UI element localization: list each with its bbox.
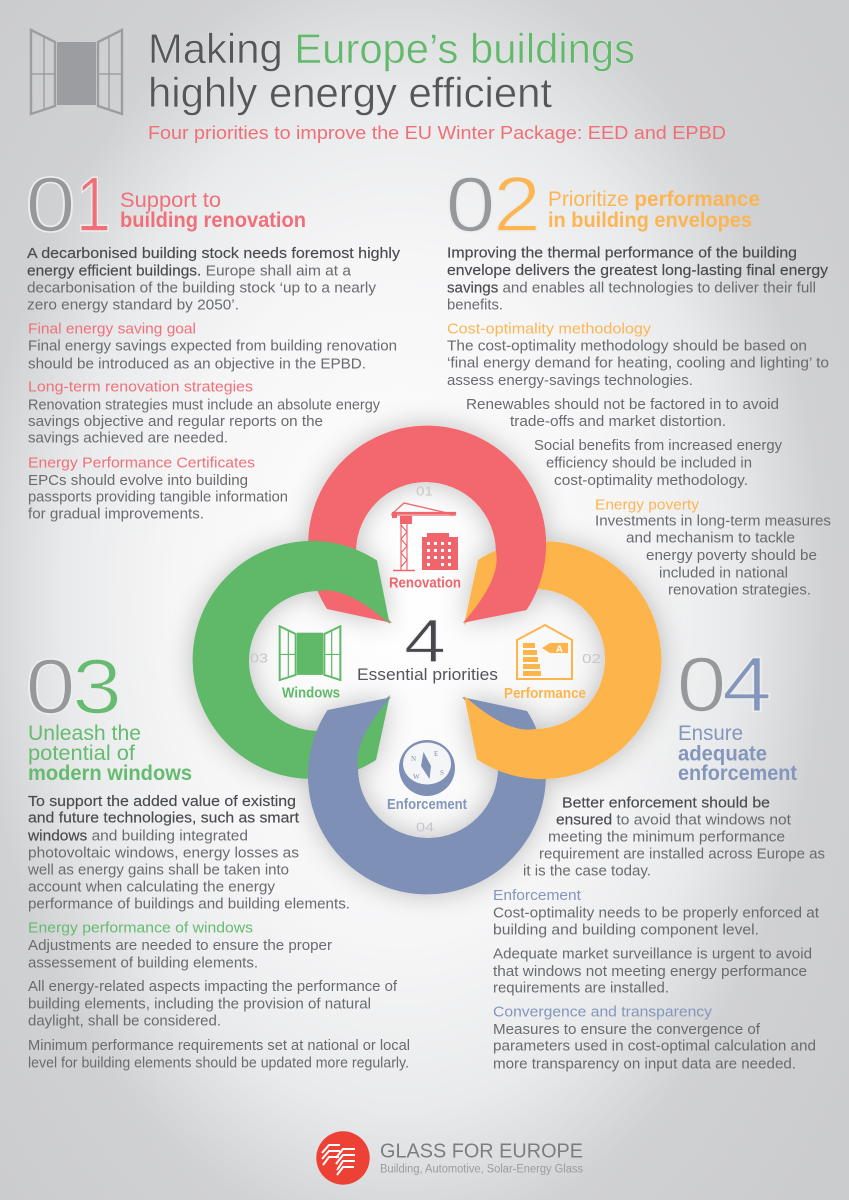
chart: four interlocking priority rings	[193, 426, 661, 894]
energy poverty: and mechanism to tackle	[626, 531, 795, 547]
heading 03: Unleash the	[28, 721, 141, 745]
final energy saving goal: should be introduced as an objective in the EPBD.	[28, 356, 366, 372]
heading 04: adequate	[678, 742, 767, 766]
logo tagline: Building, Automotive, Solar-Energy Glass	[380, 1163, 583, 1175]
energy poverty: Investments in long-term measures	[595, 514, 831, 530]
long-term renovation strategies: Long-term renovation strategies	[28, 380, 253, 396]
cost-optimality methodology: The cost-optimality methodology should be based on	[447, 339, 807, 355]
icon: building	[422, 533, 458, 570]
icon: crane	[392, 503, 456, 570]
energy-related aspects text: All energy-related aspects impacting the performance of	[28, 979, 398, 995]
intro text 02	[447, 246, 829, 313]
intro text 01: energy efficient buildings. Europe shall aim at a	[27, 264, 351, 280]
essential priorities caption: Essential priorities	[357, 666, 498, 684]
intro text 04: it is the case today.	[523, 864, 651, 880]
energy-related aspects text: building elements, including the provision of natural	[28, 996, 371, 1012]
market surveillance text: requirements are installed.	[493, 981, 669, 997]
label: 01: 01	[416, 484, 433, 499]
long-term renovation strategies: Renovation strategies must include an absolute energy	[28, 397, 381, 413]
energy performance certificates	[28, 456, 288, 522]
energy poverty	[595, 497, 831, 598]
enforcement: Enforcement	[493, 888, 581, 904]
convergence and transparency: parameters used in cost-optimal calculation and	[493, 1039, 816, 1055]
heading 01	[120, 188, 306, 232]
ring: windows (green)	[193, 541, 390, 779]
energy-related aspects text: daylight, shall be considered.	[28, 1014, 221, 1030]
number 02: 2	[493, 160, 541, 248]
panel: priority 02	[446, 160, 831, 598]
energy poverty: included in national	[659, 565, 788, 581]
number 02	[446, 160, 541, 248]
market surveillance text: that windows not meeting energy performance	[493, 964, 807, 980]
intro text 04: meeting the minimum performance	[548, 830, 785, 846]
convergence and transparency: Convergence and transparency	[493, 1005, 713, 1021]
minimum requirements text: Minimum performance requirements set at national or local	[28, 1038, 410, 1054]
icon: compass: E	[434, 750, 438, 758]
intro text 01: zero energy standard by 2050’.	[27, 298, 239, 314]
logo: Glass for Europe	[316, 1131, 583, 1185]
cost-optimality methodology	[447, 321, 829, 389]
icon: house energy rating: A	[556, 644, 563, 655]
energy poverty: Energy poverty	[595, 497, 700, 513]
number 04	[676, 640, 772, 728]
title: Making Europe’s buildings	[148, 25, 635, 72]
enforcement: Cost-optimality needs to be properly enforced at	[493, 905, 819, 921]
number 01: 0	[26, 160, 76, 248]
label: 02: 02	[582, 651, 601, 666]
icon: compass: N	[411, 755, 416, 763]
long-term renovation strategies: savings objective and regular reports on the	[28, 414, 323, 430]
intro text 01: A decarbonised building stock needs foremost highly	[27, 246, 401, 262]
final energy saving goal: Final energy saving goal	[28, 322, 196, 338]
title	[148, 25, 635, 116]
long-term renovation strategies: savings achieved are needed.	[28, 431, 228, 447]
intro text 03: windows and building integrated	[27, 829, 248, 845]
number 04: 4	[722, 640, 772, 728]
intro text 04: Better enforcement should be	[562, 795, 770, 811]
energy performance certificates: passports providing tangible information	[28, 490, 288, 506]
long-term renovation strategies	[28, 380, 381, 447]
intro text 03	[27, 794, 350, 912]
energy performance of windows: assessement of building elements.	[28, 955, 258, 971]
minimum requirements text: level for building elements should be updated more regularly.	[28, 1055, 409, 1071]
label: windows: Windows	[282, 684, 340, 701]
label: 04: 04	[416, 820, 434, 835]
title: highly energy efficient	[148, 69, 552, 116]
energy performance certificates: EPCs should evolve into building	[28, 473, 248, 489]
intro text 02: savings and enables all technologies to deliver their full	[447, 281, 816, 297]
intro text 02: Improving the thermal performance of the building	[447, 246, 797, 262]
central label	[357, 607, 498, 684]
heading 02	[548, 187, 760, 232]
ring: performance (orange)	[464, 541, 661, 779]
icon: green window	[280, 626, 340, 680]
energy performance of windows: Energy performance of windows	[28, 921, 253, 937]
cost-optimality methodology: Cost-optimality methodology	[447, 321, 652, 337]
convergence and transparency	[493, 1005, 816, 1072]
final energy saving goal: Final energy savings expected from building renovation	[28, 339, 397, 355]
number 02: 0	[446, 160, 496, 248]
enforcement	[493, 888, 819, 938]
heading 01: building renovation	[120, 208, 306, 232]
number 01	[26, 160, 111, 248]
ring: enforcement (blue)	[308, 697, 546, 894]
energy performance of windows: Adjustments are needed to ensure the proper	[28, 938, 332, 954]
icon: compass: W	[413, 773, 420, 781]
heading 01: Support to	[120, 188, 221, 212]
heading 04: Ensure	[678, 721, 743, 745]
energy performance of windows	[28, 921, 332, 971]
convergence and transparency: Measures to ensure the convergence of	[493, 1022, 761, 1038]
renewables text: trade-offs and market distortion.	[510, 414, 726, 430]
ring: renovation overlap (red)	[428, 460, 546, 623]
panel: priority 04	[493, 640, 825, 1072]
logo mark	[316, 1131, 370, 1185]
number 04: 0	[676, 640, 726, 728]
intro text 02: envelope delivers the greatest long-lasting final energy	[447, 263, 829, 279]
heading 02: Prioritize performance	[548, 187, 760, 211]
number 03	[26, 642, 122, 730]
heading 04	[678, 721, 797, 785]
social benefits text	[534, 438, 783, 489]
intro text 01	[27, 246, 401, 314]
energy performance certificates: Energy Performance Certificates	[28, 456, 255, 472]
renewables text: Renewables should not be factored in to avoid	[466, 397, 779, 413]
number 03: 3	[72, 642, 122, 730]
intro text 01: decarbonisation of the building stock ‘up to a nearly	[27, 281, 377, 297]
logo name: GLASS FOR EUROPE	[380, 1141, 583, 1163]
intro text 04: requirement are installed across Europe as	[539, 846, 825, 862]
label: renovation: Renovation	[389, 575, 461, 592]
minimum requirements text	[28, 1038, 410, 1071]
energy poverty: renovation strategies.	[668, 582, 811, 598]
heading 03: potential of	[28, 741, 135, 765]
icon: house energy rating	[517, 625, 572, 679]
intro text 03: To support the added value of existing	[28, 794, 296, 810]
social benefits text: efficiency should be included in	[546, 456, 752, 472]
panel: priority 03	[26, 642, 410, 1071]
label: enforcement: Enforcement	[387, 796, 467, 813]
heading 03	[28, 721, 192, 785]
final energy saving goal	[28, 322, 397, 372]
intro text 03: performance of buildings and building elements.	[28, 896, 350, 912]
intro text 04	[523, 795, 825, 880]
intro text 03: account when calculating the energy	[28, 879, 276, 895]
label: performance: Performance	[504, 685, 586, 702]
label: 03: 03	[250, 651, 268, 666]
cost-optimality methodology: ‘final energy demand for heating, cooling and lighting’ to	[447, 355, 829, 371]
cost-optimality methodology: assess energy-savings technologies.	[447, 373, 693, 389]
intro text 03: photovoltaic windows, energy losses as	[28, 845, 299, 861]
intro text 03: well as energy gains shall be taken into	[27, 862, 289, 878]
big number 4: 4	[404, 607, 446, 675]
intro text 03: and future technologies, such as smart	[28, 811, 299, 827]
convergence and transparency: more transparency on input data are needed.	[493, 1056, 796, 1072]
heading 02: in building envelopes	[548, 208, 752, 232]
market surveillance text	[493, 946, 812, 997]
energy poverty: energy poverty should be	[646, 548, 817, 564]
enforcement: building and building component level.	[493, 922, 759, 938]
intro text 02: benefits.	[447, 297, 503, 313]
heading 03: modern windows	[28, 761, 192, 785]
heading 04: enforcement	[678, 761, 797, 785]
subtitle: Four priorities to improve the EU Winter Package: EED and EPBD	[148, 122, 726, 143]
panel: priority 01	[26, 160, 401, 522]
intro text 04: ensured to avoid that windows not	[556, 812, 791, 828]
number 03: 0	[26, 642, 76, 730]
energy-related aspects text	[28, 979, 398, 1030]
market surveillance text: Adequate market surveillance is urgent to avoid	[493, 946, 812, 962]
renewables text	[466, 397, 779, 430]
energy performance certificates: for gradual improvements.	[28, 506, 204, 522]
social benefits text: Social benefits from increased energy	[534, 438, 783, 454]
icon: compass	[399, 740, 455, 796]
icon: grey open window	[31, 30, 122, 114]
number 01: 1	[76, 160, 111, 248]
social benefits text: cost-optimality methodology.	[554, 473, 748, 489]
ring: renovation (red)	[308, 426, 546, 623]
icon: compass: S	[440, 769, 444, 777]
